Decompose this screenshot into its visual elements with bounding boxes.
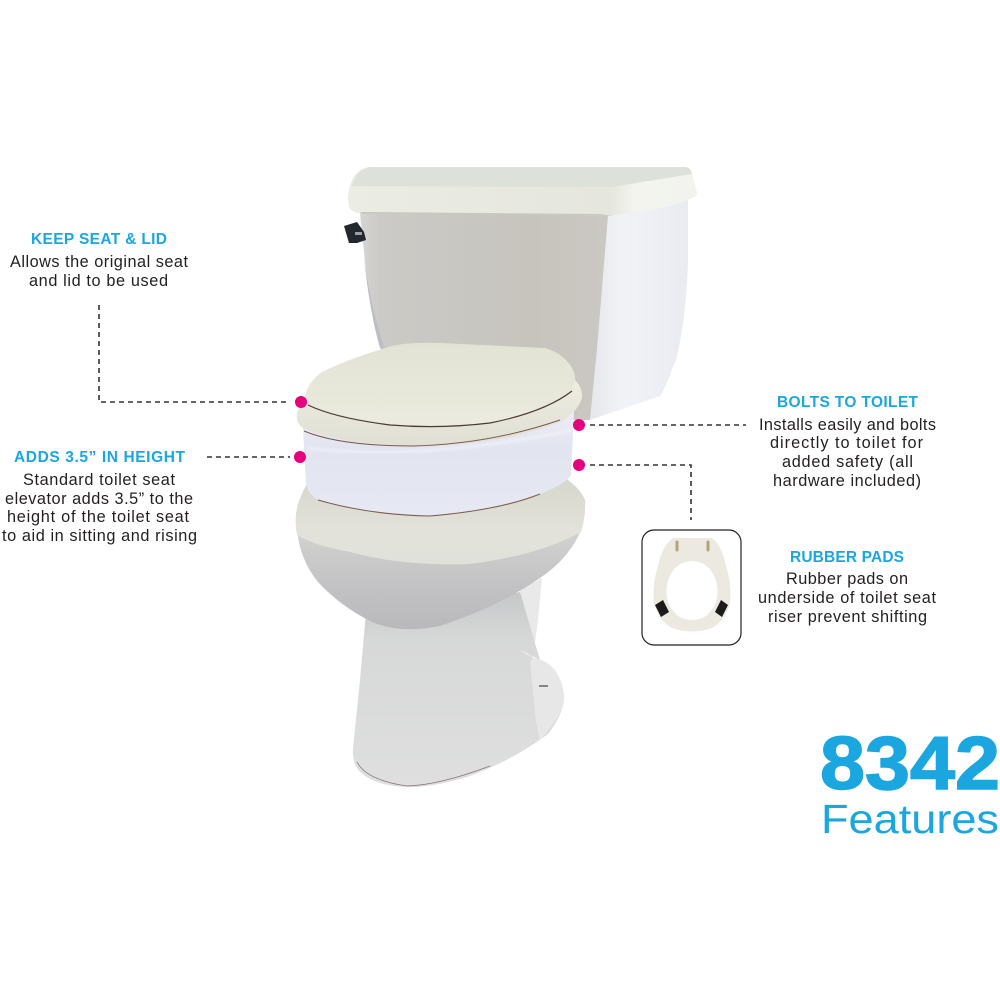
dashed connector lines: [99, 305, 746, 520]
callout: rubber pads: [758, 549, 936, 626]
callout: adds height: ADDS 3.5” IN HEIGHT: [14, 449, 186, 466]
riser ring with rubber pads: [654, 538, 730, 632]
callout: adds height: to aid in sitting and rising: [2, 527, 197, 545]
callout: bolts to toilet: hardware included): [773, 472, 921, 490]
callout: adds height: elevator adds 3.5” to the: [5, 490, 193, 508]
product number and title: [820, 721, 1000, 842]
riser: [303, 412, 574, 516]
callout: keep seat and lid: [10, 231, 188, 290]
toilet bowl: [296, 478, 585, 629]
callout: keep seat and lid: Allows the original seat: [10, 253, 188, 271]
toilet base pedestal: [353, 578, 564, 787]
callout: adds height: height of the toilet seat: [7, 508, 189, 526]
toilet photo illustration: [296, 167, 697, 787]
callout: keep seat and lid: KEEP SEAT & LID: [31, 231, 167, 248]
tank lid: [348, 167, 697, 216]
callout: rubber pads: RUBBER PADS: [790, 549, 904, 566]
toilet tank: [360, 200, 688, 420]
callout: rubber pads: underside of toilet seat: [758, 589, 936, 607]
closed lid: [304, 343, 575, 446]
callout: keep seat and lid: and lid to be used: [29, 272, 168, 290]
inset: underside of riser: [642, 530, 741, 645]
callout: bolts to toilet: directly to toilet for: [770, 434, 924, 452]
callout: rubber pads: riser prevent shifting: [768, 608, 927, 626]
product number and title: 8342: [820, 721, 1000, 805]
callout: rubber pads: Rubber pads on: [786, 570, 908, 588]
marker dots: [294, 396, 585, 471]
seat ring: [297, 380, 582, 446]
callout: bolts to toilet: BOLTS TO TOILET: [777, 394, 919, 411]
callout: adds height: [2, 449, 197, 545]
callout: bolts to toilet: Installs easily and bolts: [759, 416, 936, 434]
callout: bolts to toilet: [759, 394, 936, 490]
callout: adds height: Standard toilet seat: [23, 471, 175, 489]
icon: flush handle: [344, 222, 366, 243]
product number and title: Features: [821, 796, 999, 842]
callout: bolts to toilet: added safety (all: [782, 453, 913, 471]
